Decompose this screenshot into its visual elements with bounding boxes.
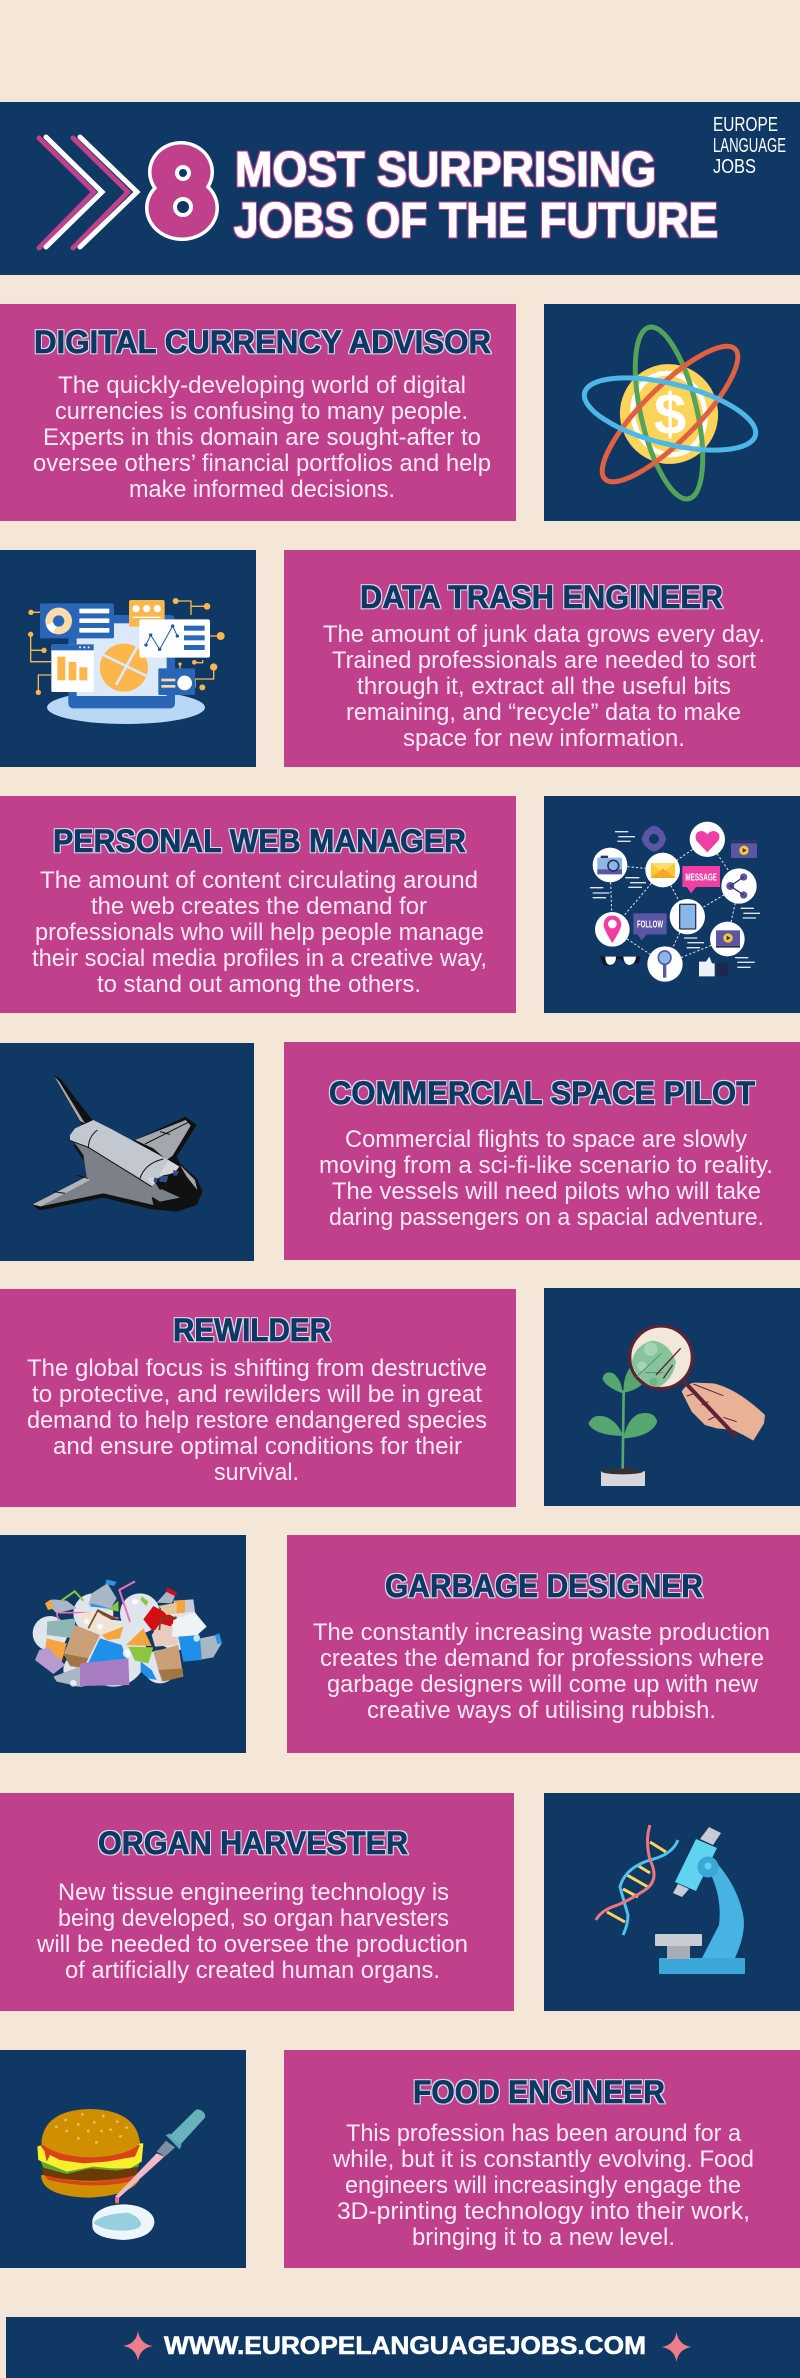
big number 8: 8 [150,126,216,258]
text block: rewilder [27,1355,487,1486]
logo: Europe Language Jobs: EUROPE [713,114,778,136]
text block: rewilder: to protective, and rewilders will be in great [32,1381,482,1408]
text block: organ harvester [36,1879,468,1984]
text block: commercial space pilot: daring passengers on a spacial adventure. [329,1204,764,1231]
footer banner [6,2317,800,2378]
icon: garbage pile [33,1579,222,1687]
text block: food engineer [332,2120,754,2251]
icon: dollar coin with orbits [577,321,763,505]
panel: personal web manager [0,796,516,1013]
text block: personal web manager: their social media profiles in a creative way, [32,945,487,972]
panel: commercial space pilot [284,1042,800,1260]
text block: commercial space pilot: moving from a sci-fi-like scenario to reality. [319,1152,773,1179]
heading: garbage designer: GARBAGE DESIGNER [385,1568,703,1604]
panel: data trash engineer [284,550,800,767]
text block: food engineer: while, but it is constantly evolving. Food [332,2146,754,2173]
heading: commercial space pilot: COMMERCIAL SPACE PILOT [329,1075,755,1111]
heading: rewilder: REWILDER [173,1312,331,1348]
icon: social media network: MESSAGE [685,872,717,883]
header banner [0,102,800,275]
icon: data dashboard [28,598,225,724]
text block: food engineer: 3D-printing technology into their work, [337,2198,750,2225]
text block: food engineer: engineers will increasingly engage the [345,2172,741,2199]
panel: food engineer [284,2050,800,2268]
text block: commercial space pilot: Commercial flights to space are slowly [345,1126,747,1153]
panel: burger icon [0,2050,246,2268]
text block: food engineer: bringing it to a new level. [412,2224,675,2251]
icon: DNA and microscope [596,1825,745,1974]
panel: digital currency advisor [0,304,516,521]
icon: social media network [590,822,760,982]
website url: WWW.EUROPELANGUAGEJOBS.COM [164,2332,646,2360]
text block: food engineer: This profession has been around for a [346,2120,742,2147]
text block: organ harvester: will be needed to oversee the production [36,1931,468,1958]
logo: Europe Language Jobs [713,114,786,178]
text block: organ harvester: being developed, so organ harvesters [58,1905,449,1932]
text block: rewilder: and ensure optimal conditions for their [53,1433,462,1460]
panel: plant icon [544,1288,800,1506]
heading: organ harvester: ORGAN HARVESTER [98,1825,408,1861]
title: JOBS OF THE FUTURE [234,194,718,248]
heading: digital currency advisor: DIGITAL CURRENCY ADVISOR [34,324,491,360]
icon: double chevron arrows [39,137,137,248]
text block: organ harvester: of artificially created human organs. [65,1957,440,1984]
panel: coin icon [544,304,800,521]
text block: garbage designer: garbage designers will come up with new [327,1671,759,1698]
title [234,143,718,248]
icon: right sparkle [662,2332,692,2362]
icon: social media network: FOLLOW [637,920,663,931]
panel: garbage icon [0,1535,246,1753]
text block: organ harvester: New tissue engineering technology is [58,1879,449,1906]
text block: garbage designer [313,1619,770,1724]
text block: garbage designer: creates the demand for professions where [320,1645,764,1672]
panel: garbage designer [287,1535,800,1753]
text block: digital currency advisor [33,372,491,503]
text block: data trash engineer: space for new information. [403,725,685,752]
text block: digital currency advisor: Experts in this domain are sought-after to [43,424,481,451]
heading: food engineer: FOOD ENGINEER [413,2074,665,2110]
text block: commercial space pilot [319,1126,773,1231]
text block: digital currency advisor: oversee others’ financial portfolios and help [33,450,491,477]
text block: personal web manager: to stand out among the others. [97,971,421,998]
text block: personal web manager: the web creates the demand for [91,893,427,920]
panel: rewilder [0,1289,516,1507]
text block: digital currency advisor: The quickly-developing world of digital [58,372,466,399]
text block: rewilder: demand to help restore endangered species [27,1407,487,1434]
panel: microscope icon [544,1793,800,2011]
logo: Europe Language Jobs: JOBS [713,156,756,178]
text block: data trash engineer: through it, extract all the useful bits [357,673,731,700]
text block: rewilder: The global focus is shifting from destructive [27,1355,487,1382]
text block: garbage designer: The constantly increasing waste production [313,1619,770,1646]
text block: digital currency advisor: currencies is confusing to many people. [55,398,468,425]
text block: personal web manager [32,867,487,998]
heading: data trash engineer: DATA TRASH ENGINEER [360,579,723,615]
panel: organ harvester [0,1793,514,2011]
text block: data trash engineer: The amount of junk data grows every day. [323,621,765,648]
icon: left sparkle [123,2331,153,2361]
text block: rewilder: survival. [214,1459,299,1486]
icon: space shuttle [32,1075,203,1212]
text block: personal web manager: The amount of content circulating around [40,867,478,894]
panel: data icon [0,550,256,767]
text block: digital currency advisor: make informed decisions. [129,476,395,503]
title: MOST SURPRISING [235,143,656,197]
icon: plant and magnifying glass [588,1326,765,1486]
text block: data trash engineer: remaining, and “recycle” data to make [346,699,741,726]
panel: social media icon [544,796,800,1013]
panel: space shuttle icon [0,1043,254,1261]
text block: commercial space pilot: The vessels will need pilots who will take [332,1178,761,1205]
heading: personal web manager: PERSONAL WEB MANAGER [53,823,466,859]
icon: dollar coin with orbits: $ [654,382,686,447]
text block: garbage designer: creative ways of utilising rubbish. [367,1697,716,1724]
text block: data trash engineer [323,621,765,752]
text block: data trash engineer: Trained professionals are needed to sort [332,647,756,674]
text block: personal web manager: professionals who will help people manage [35,919,484,946]
icon: burger and dropper [37,2109,205,2240]
